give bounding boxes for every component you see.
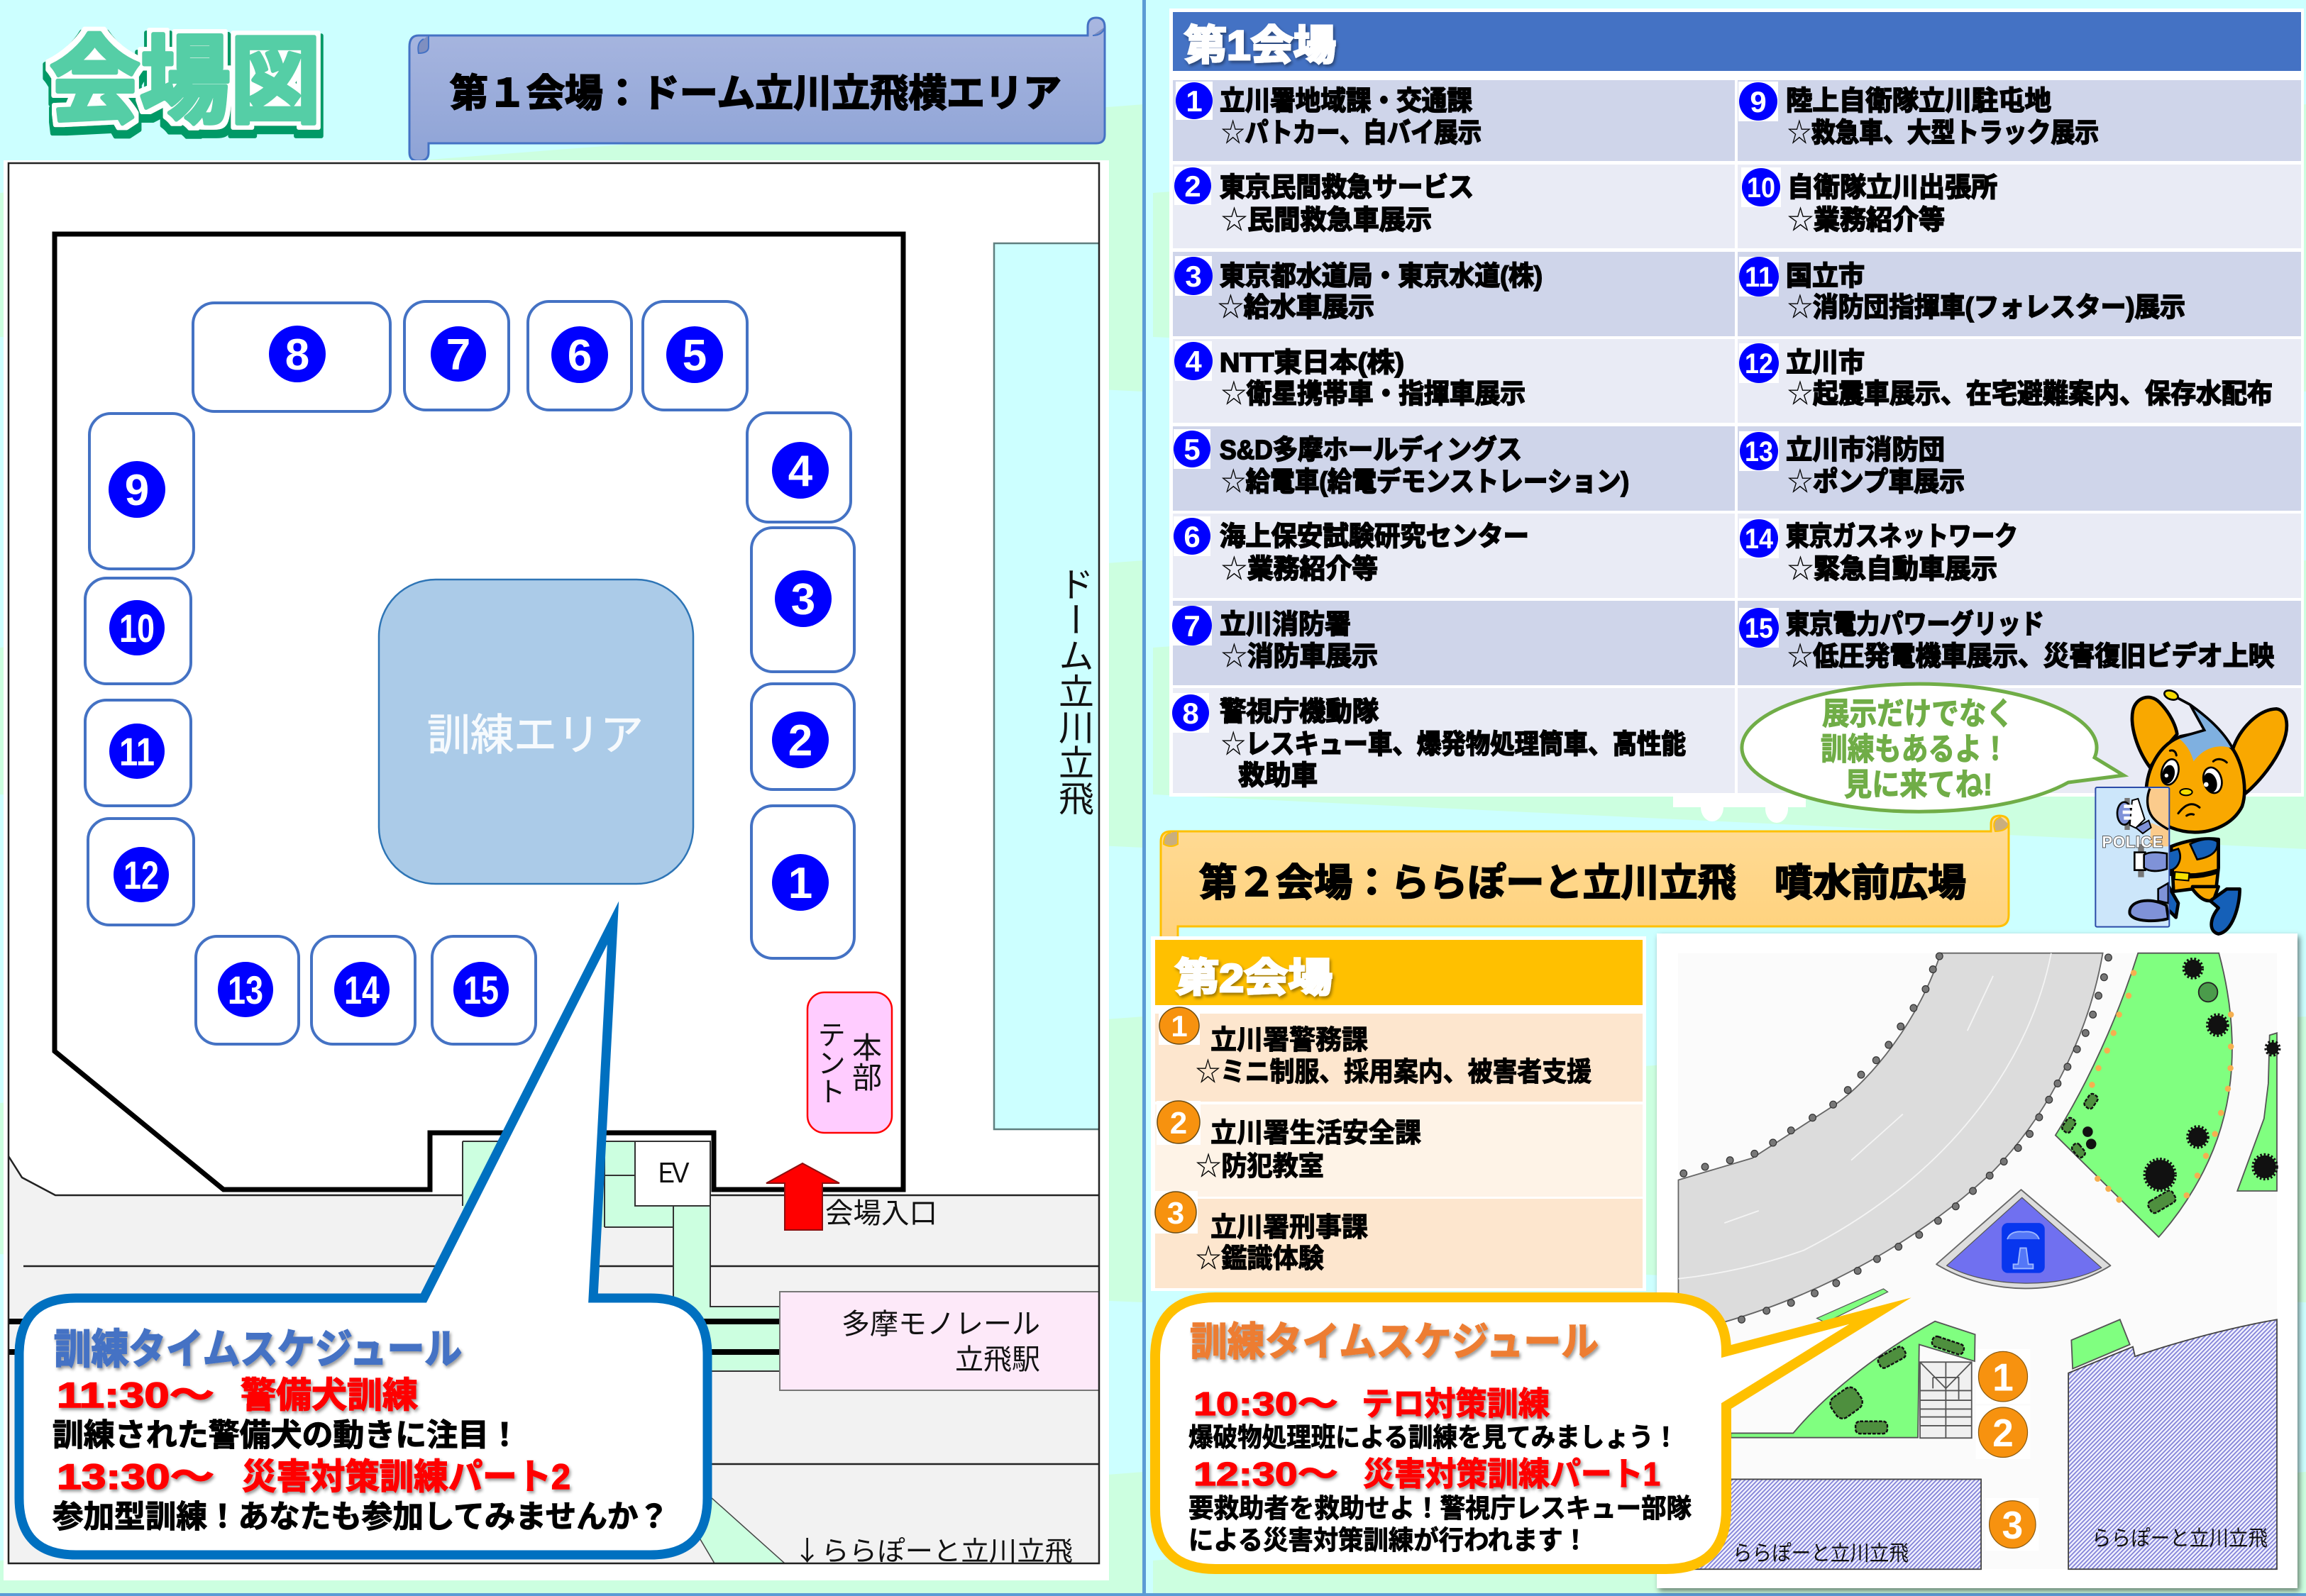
number badges: 10	[1747, 172, 1775, 204]
number badges: 3	[1167, 1196, 1184, 1231]
exhibitor names left column: 警視庁機動隊	[1220, 697, 1379, 727]
map markers 1 to 3	[1976, 1349, 2039, 1551]
map markers 1 to 3: 1	[1992, 1356, 2014, 1400]
schedule item 1: テロ対策訓練	[1362, 1385, 1550, 1422]
training area	[379, 580, 693, 884]
stalls 1 to 15	[85, 301, 854, 1044]
number badges	[1172, 82, 1781, 733]
exhibitor names right column: 立川市	[1786, 348, 1865, 378]
map labels: ららぽーと立川立飛	[2092, 1521, 2268, 1552]
fountain	[1936, 1190, 2110, 1288]
number badges: 5	[1184, 433, 1201, 466]
table header	[1155, 940, 1643, 1005]
stalls 1 to 15: 12	[123, 853, 159, 897]
exhibitor names right column: ☆緊急自動車展示	[1787, 555, 1997, 584]
exhibitor names left column: ☆業務紹介等	[1221, 555, 1378, 584]
exhibitor names right column: 立川市消防団	[1786, 436, 1945, 465]
exhibitor names right column: 国立市	[1786, 262, 1865, 292]
headquarters tent	[807, 992, 892, 1133]
row text: ☆鑑識体験	[1196, 1244, 1324, 1274]
number badges: 13	[1745, 436, 1773, 467]
exhibitor names right column: ☆消防団指揮車(フォレスター)展示	[1787, 293, 2185, 323]
decorative white car under table	[1673, 793, 1806, 823]
number badges: 14	[1745, 523, 1774, 555]
callout: venue 2 schedule	[1155, 1297, 1880, 1569]
stalls 1 to 15: 4	[788, 447, 813, 496]
exhibitor names left column: ☆レスキュー車、爆発物処理筒車、高性能	[1221, 730, 1686, 760]
stalls 1 to 15: 7	[446, 331, 470, 379]
table rows	[1173, 80, 2301, 793]
number badges: 7	[1184, 609, 1201, 643]
row text: ☆ミニ制服、採用案内、被害者支援	[1196, 1058, 1591, 1087]
stalls 1 to 15: 13	[228, 968, 263, 1012]
ground and walkways	[9, 1141, 1099, 1563]
schedule item 1: 10:30～	[1193, 1385, 1338, 1422]
exhibitor names right column	[1786, 87, 2274, 672]
exhibitor names right column: 東京電力パワーグリッド	[1786, 610, 2044, 640]
stalls 1 to 15: 8	[285, 331, 309, 379]
exhibitor names left column: 立川消防署	[1220, 610, 1351, 640]
label: lalaport direction: ↓ららぽーと立川立飛	[793, 1529, 1073, 1568]
border	[9, 163, 1099, 1563]
map labels: ららぽーと立川立飛	[1733, 1536, 1909, 1567]
exhibitor names left column: NTT東日本(株)	[1220, 348, 1404, 378]
stalls 1 to 15: 11	[119, 729, 155, 774]
building outline	[55, 234, 903, 1190]
dome strip: ドーム立川立飛	[1051, 566, 1102, 816]
number badges: 12	[1745, 348, 1773, 379]
panel: venue 1 map	[4, 160, 1109, 1580]
stalls 1 to 15: 2	[788, 716, 812, 765]
exhibitor names left column: ☆民間救急車展示	[1221, 206, 1432, 235]
banner: venue 1 heading	[409, 18, 1105, 161]
table header: 第2会場	[1175, 955, 1333, 1000]
schedule item 1: 11:30～	[57, 1375, 214, 1415]
row text: 立川署刑事課	[1210, 1213, 1368, 1243]
exhibitor names left column: ☆パトカー、白バイ展示	[1221, 118, 1482, 148]
map markers 1 to 3: 2	[1992, 1412, 2014, 1455]
stairs	[1920, 1362, 1972, 1438]
callout: venue 1 schedule	[19, 923, 707, 1555]
station box: 多摩モノレール	[842, 1301, 1040, 1342]
exhibitor names left column: 救助車	[1238, 761, 1318, 791]
station box: 立飛駅	[955, 1336, 1040, 1378]
schedule item 2	[57, 1457, 570, 1497]
headquarters tent: 本部	[846, 1032, 888, 1092]
banner: venue 2 heading: 第２会場：ららぽーと立川立飛 噴水前広場	[1199, 862, 1966, 904]
callout: venue 1 schedule: 訓練された警備犬の動きに注目！	[53, 1418, 520, 1453]
stalls 1 to 15: 1	[788, 859, 812, 908]
number badges: 9	[1750, 85, 1767, 118]
number badges: 6	[1184, 520, 1201, 553]
mascot: police character with shield	[2095, 689, 2287, 934]
stalls 1 to 15: 3	[791, 575, 815, 624]
training area: 訓練エリア	[427, 699, 644, 763]
stalls 1 to 15: 10	[119, 606, 155, 650]
schedule item 1	[1193, 1385, 1550, 1422]
banner: venue 2 heading	[1161, 816, 2009, 938]
exhibitor names right column: 東京ガスネットワーク	[1786, 522, 2018, 552]
stalls 1 to 15: 6	[568, 331, 592, 380]
exhibitor names left column: ☆消防車展示	[1221, 642, 1378, 672]
number badges	[1155, 1007, 1201, 1234]
callout: venue 2 schedule: 爆破物処理班による訓練を見てみましょう！	[1188, 1423, 1678, 1452]
schedule item 2: 12:30～	[1193, 1456, 1338, 1492]
exhibitor names left column: 海上保安試験研究センター	[1220, 522, 1529, 552]
exhibitor names right column: ☆ポンプ車展示	[1787, 467, 1965, 497]
speech bubble: 展示だけでなく	[1822, 697, 2014, 731]
station box	[780, 1292, 1099, 1390]
panel: venue 1 exhibitor table	[1169, 9, 2304, 797]
callout: venue 1 schedule: 参加型訓練！あなたも参加してみませんか？	[53, 1500, 669, 1534]
exhibitor names right column: ☆起震車展示、在宅避難案内、保存水配布	[1787, 379, 2273, 409]
number badges: 15	[1745, 613, 1773, 644]
number badges: 1	[1186, 84, 1203, 118]
exhibitor names right column: 陸上自衛隊立川駐屯地	[1786, 87, 2051, 116]
exhibitor names left column: ☆給電車(給電デモンストレーション)	[1221, 467, 1629, 497]
schedule item 2: 13:30～	[57, 1457, 214, 1497]
exhibitor names right column: 自衛隊立川出張所	[1787, 173, 1997, 203]
number badges: 3	[1185, 260, 1202, 293]
elevator box: ＥＶ	[653, 1151, 694, 1190]
title: 会場図	[50, 28, 321, 135]
planting areas	[1731, 953, 2278, 1438]
row text: ☆防犯教室	[1196, 1152, 1324, 1182]
map labels	[1733, 1521, 2268, 1567]
hatched buildings	[1678, 1319, 2277, 1569]
schedule item 2: 災害対策訓練パート2	[242, 1457, 570, 1497]
stalls 1 to 15: 5	[683, 331, 707, 380]
arrow: venue entrance	[766, 1163, 937, 1231]
headquarters tent: テント	[811, 1020, 852, 1105]
stalls 1 to 15: 14	[344, 968, 380, 1012]
schedule item 2: 災害対策訓練パート1	[1363, 1456, 1660, 1492]
dome strip	[994, 243, 1102, 1129]
elevator box	[635, 1141, 710, 1206]
exhibitor names left column	[1218, 87, 1686, 791]
row text: 立川署警務課	[1210, 1026, 1368, 1055]
number badges: 2	[1170, 1106, 1187, 1141]
number badges: 11	[1745, 262, 1773, 293]
exhibitor names left column: S&D多摩ホールディングス	[1220, 435, 1522, 465]
table header	[1173, 12, 2301, 71]
row text	[1196, 1026, 1591, 1274]
stalls 1 to 15: 9	[125, 466, 149, 515]
number badges: 8	[1182, 697, 1199, 730]
exhibitor names right column: ☆業務紹介等	[1787, 206, 1945, 235]
stalls 1 to 15: 15	[463, 968, 499, 1012]
speech bubble	[1742, 684, 2124, 811]
exhibitor names left column: ☆給水車展示	[1218, 293, 1374, 323]
number badges: 4	[1185, 345, 1202, 378]
exhibitor names left column: 立川署地域課・交通課	[1220, 87, 1472, 116]
exhibitor names left column: ☆衛星携帯車・指揮車展示	[1221, 379, 1526, 409]
callout: venue 1 schedule: 訓練タイムスケジュール	[54, 1326, 462, 1373]
panel: venue 2 exhibitor table	[1151, 936, 1646, 1291]
callout: venue 2 schedule: による災害対策訓練が行われます！	[1188, 1526, 1588, 1555]
schedule item 1: 警備犬訓練	[241, 1375, 418, 1415]
speech bubble: 訓練もあるよ！	[1821, 732, 2009, 767]
table header: 第1会場	[1184, 23, 1336, 69]
arrow: venue entrance: 会場入口	[825, 1190, 937, 1231]
table rows	[1155, 1014, 1643, 1288]
number badges: 2	[1184, 170, 1201, 203]
number badges: 1	[1171, 1009, 1188, 1043]
map: venue 2	[1657, 933, 2297, 1588]
exhibitor names left column: 東京都水道局・東京水道(株)	[1220, 262, 1543, 292]
speech bubble: 見に来てね!	[1844, 767, 1992, 802]
schedule item 2	[1193, 1456, 1660, 1492]
banner: venue 1 heading: 第１会場：ドーム立川立飛横エリア	[450, 72, 1061, 115]
callout: venue 2 schedule: 要救助者を救助せよ！警視庁レスキュー部隊	[1188, 1494, 1692, 1523]
road	[1678, 953, 2112, 1331]
exhibitor names left column: 東京民間救急サービス	[1220, 173, 1474, 203]
map markers 1 to 3: 3	[2002, 1504, 2023, 1547]
callout: venue 2 schedule: 訓練タイムスケジュール	[1190, 1319, 1599, 1364]
exhibitor names right column: ☆救急車、大型トラック展示	[1787, 118, 2099, 148]
schedule item 1	[57, 1375, 418, 1415]
row text: 立川署生活安全課	[1210, 1119, 1421, 1148]
mascot: police character with shield: POLICE	[2102, 833, 2163, 851]
exhibitor names right column: ☆低圧発電機車展示、災害復旧ビデオ上映	[1787, 641, 2274, 672]
